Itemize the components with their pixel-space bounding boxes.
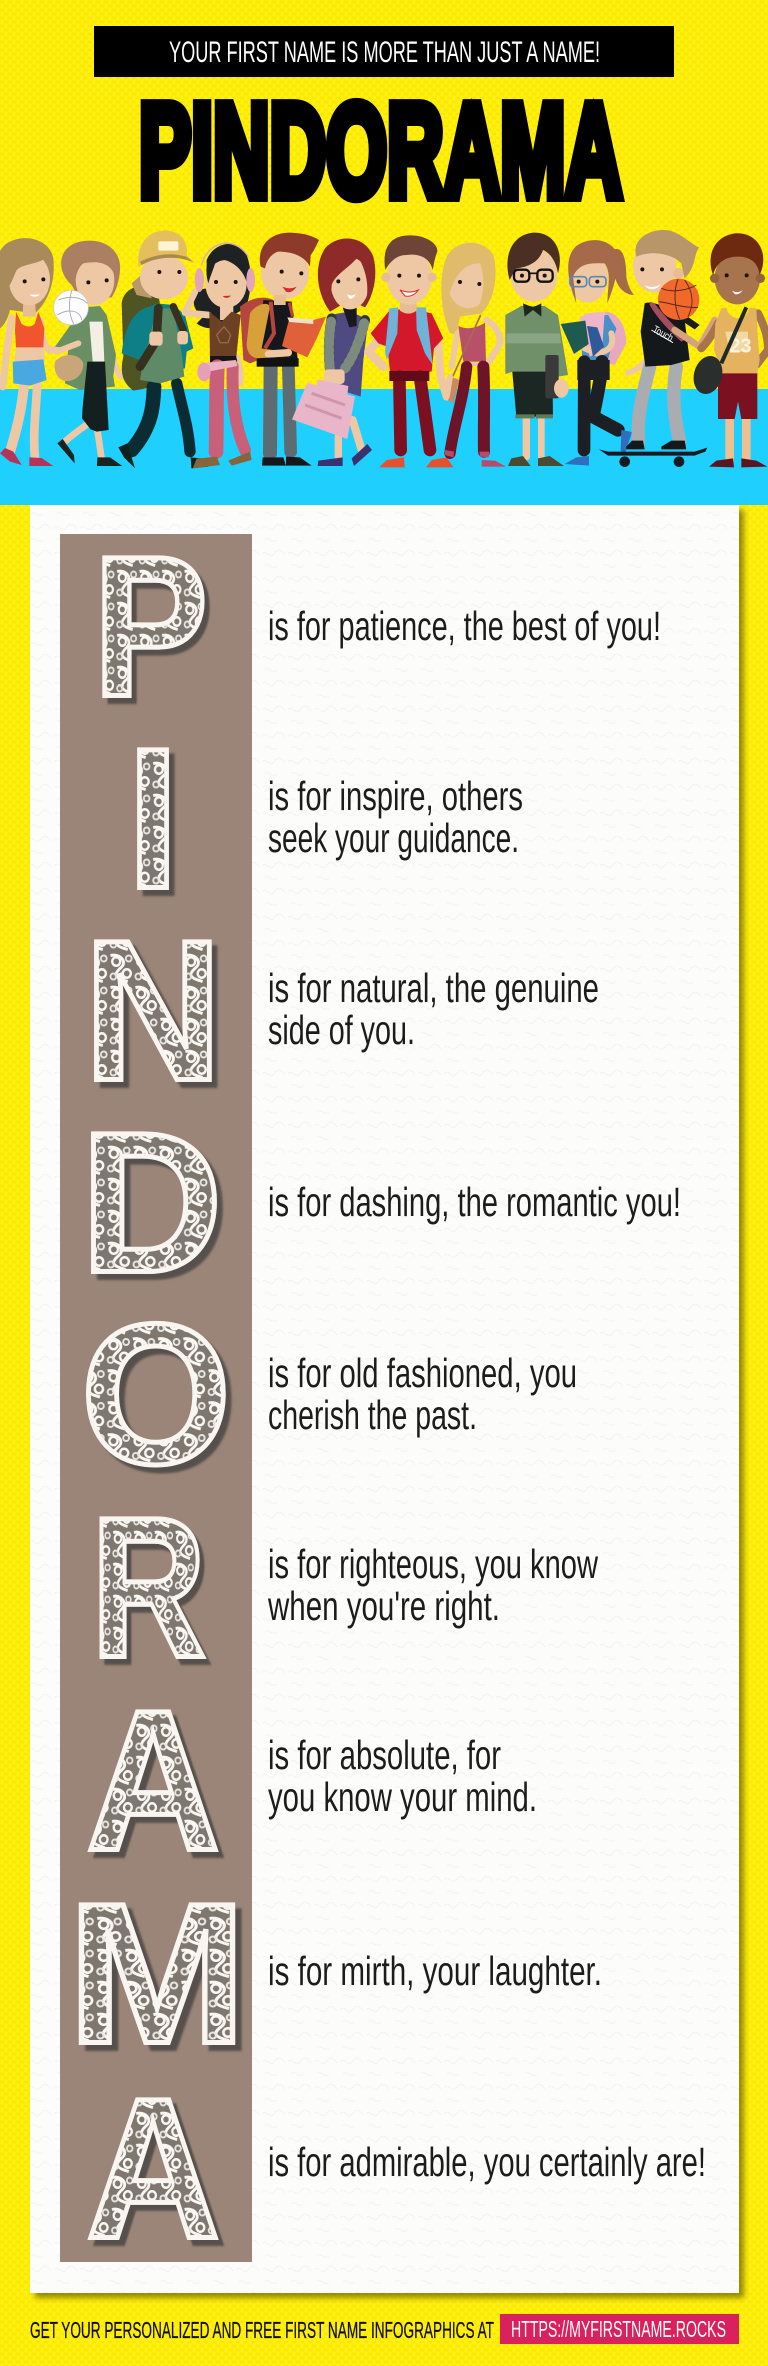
ornate letter O: O: [80, 1282, 231, 1506]
text: O meaning: is for old fashioned, you: [268, 1350, 577, 1396]
person: skater with basketball: [599, 230, 715, 467]
text: A meaning: you know your mind.: [268, 1774, 537, 1820]
text: O meaning: [268, 1350, 577, 1438]
ornate letter I: I: [127, 707, 179, 931]
ornate letter D: D: [80, 1091, 223, 1315]
figures 9-13: [505, 230, 768, 467]
figures 1-4: [0, 231, 255, 468]
person: boy with black glasses and laptop: [505, 233, 569, 466]
letter column background: [60, 534, 252, 2262]
person: hiker in cap with backpack: [118, 231, 208, 468]
ornate letter A: A: [86, 1668, 220, 1892]
person: girl with ponytail, tablet and pink backpack: [561, 240, 634, 466]
person: blonde girl in rose top: [441, 243, 506, 467]
person: long-haired girl in orange top: [0, 238, 75, 466]
text: A meaning: is for absolute, for: [268, 1732, 501, 1778]
ornate letter N: N: [84, 899, 222, 1122]
header tagline bar: [94, 26, 674, 77]
text: R meaning: when you're right.: [267, 1583, 500, 1629]
ornate letter A: A: [86, 2056, 220, 2280]
text: O meaning: cherish the past.: [268, 1392, 477, 1438]
text: I meaning: seek your guidance.: [268, 815, 519, 861]
ornate letter M: M: [67, 1863, 247, 2086]
person: skater with basketball: Touch: [651, 324, 675, 344]
text: I meaning: [268, 773, 523, 861]
person: curly-haired boy in yellow jersey: [689, 233, 768, 467]
text: N meaning: is for natural, the genuine: [268, 965, 599, 1011]
figures 5-8: [240, 233, 506, 467]
illustration: group of thirteen young people: [0, 230, 768, 468]
person: curly-haired boy in yellow jersey: 23: [729, 336, 752, 358]
text: N meaning: [268, 965, 599, 1053]
panel: acrostic card: [30, 505, 739, 2293]
ornate letter P: P: [93, 515, 208, 738]
person: girl with volleyball: [54, 241, 122, 466]
person: girl with pink headphones: [185, 243, 255, 468]
text: I meaning: is for inspire, others: [268, 773, 523, 819]
text: R meaning: [267, 1541, 598, 1629]
text: M meaning: is for mirth, your laughter.: [268, 1948, 602, 1994]
text: A meaning: [268, 1732, 537, 1820]
text: R meaning: is for righteous, you know: [268, 1541, 598, 1587]
person: boy with open red book: [240, 233, 326, 466]
person: girl with red bob and pink bag: [292, 238, 375, 466]
text: N meaning: side of you.: [268, 1007, 415, 1053]
ornate letter R: R: [91, 1476, 206, 1700]
person: boy in red shirt with backpack straps: [368, 235, 453, 467]
blue floor band: [0, 389, 768, 505]
